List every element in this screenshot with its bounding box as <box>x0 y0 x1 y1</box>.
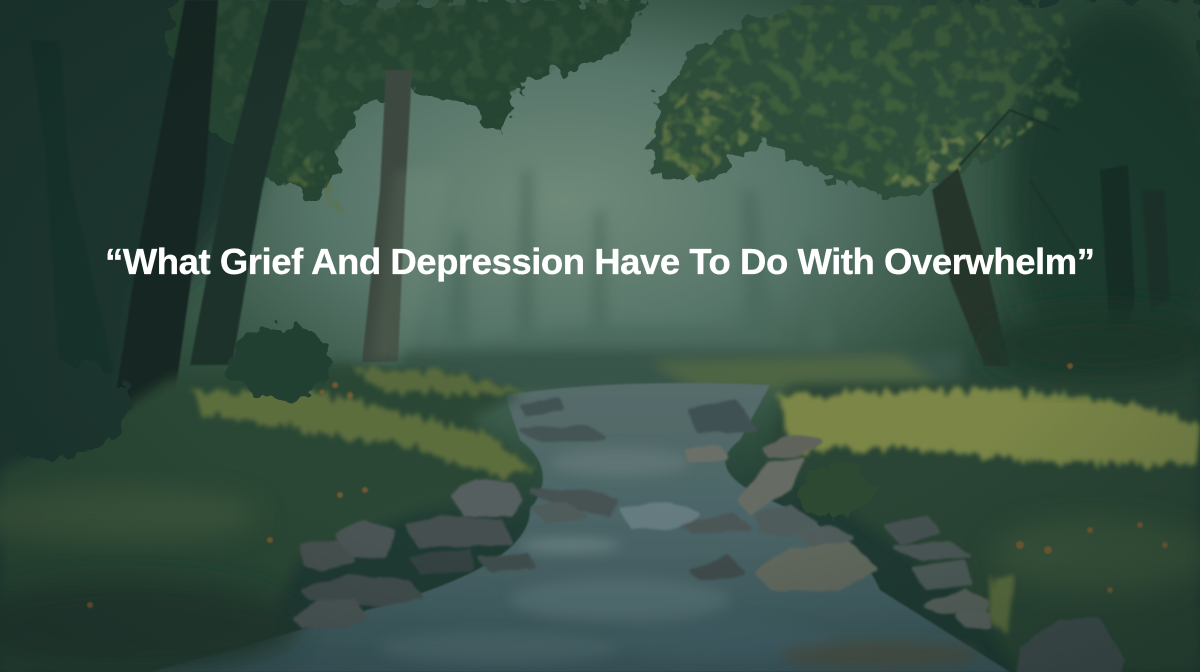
distant trees <box>420 170 860 360</box>
water highlights <box>380 448 980 669</box>
wildflowers <box>87 363 1168 608</box>
canopy: left dark <box>0 0 640 490</box>
title: “What Grief And Depression Have To Do With Overwhelm” <box>105 241 1095 282</box>
canopy: right green <box>275 0 1200 390</box>
midground far bank <box>400 350 960 395</box>
light shaft <box>372 170 450 360</box>
rocks <box>296 400 1122 672</box>
tree trunks <box>30 0 1170 430</box>
left bank grass <box>0 324 535 672</box>
right bank grass <box>765 309 1200 672</box>
stream <box>150 383 1010 672</box>
